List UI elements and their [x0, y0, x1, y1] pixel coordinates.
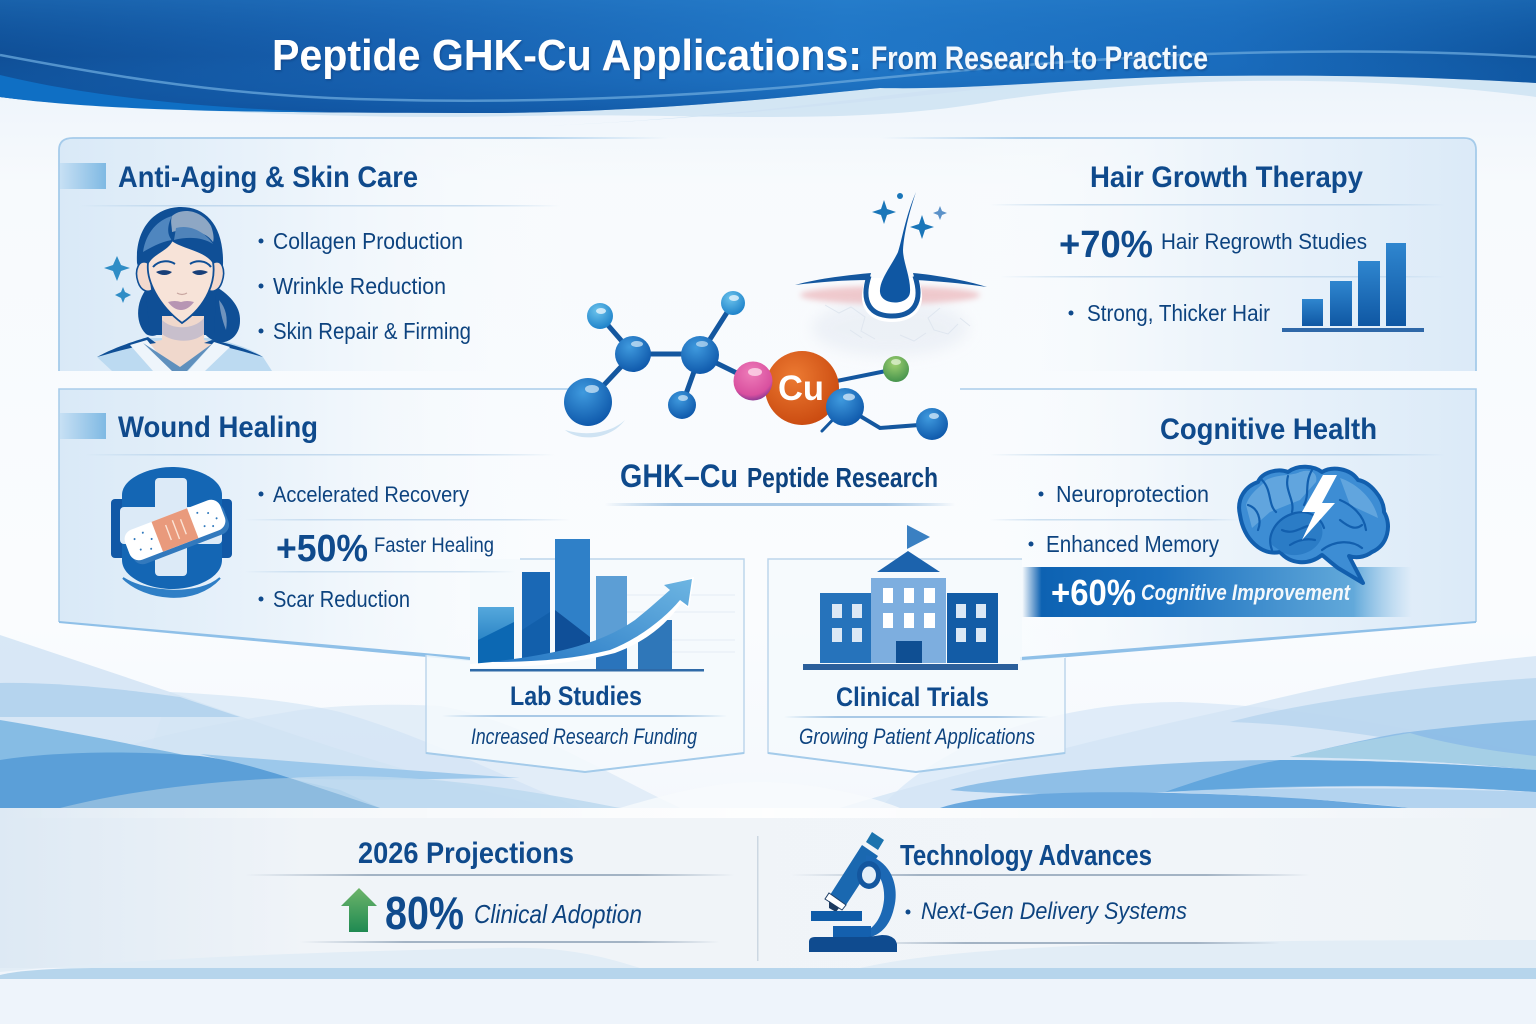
panel frame: middle row — [59, 389, 1476, 661]
stat: faster healing — [276, 528, 494, 570]
heading: 2026 projections: 2026 Projections — [358, 837, 574, 870]
icon: hospital building — [803, 525, 1018, 670]
icon: green up arrow — [341, 888, 377, 932]
heading: wound healing: Wound Healing — [118, 411, 318, 444]
callout: cognitive improvement: Cognitive Improvement — [1141, 580, 1351, 605]
panel: wound healing — [60, 411, 570, 612]
stat: clinical adoption — [385, 887, 642, 939]
heading: lab studies: Lab Studies — [510, 681, 642, 711]
icon: brain — [1239, 467, 1388, 583]
title: Peptide GHK-Cu Applications: — [272, 31, 862, 80]
caption: GHK-Cu peptide research: Peptide Research — [747, 462, 938, 493]
lower background waves — [0, 635, 1536, 808]
stat: hair regrowth: Hair Regrowth Studies — [1161, 229, 1367, 254]
stat: hair regrowth — [1059, 224, 1367, 266]
icon: microscope — [809, 832, 897, 952]
panel: clinical trials — [768, 525, 1065, 772]
panel: lab studies — [426, 539, 744, 772]
icon: woman's face — [97, 207, 272, 371]
caption: GHK-Cu peptide research: GHK–Cu — [620, 458, 738, 494]
chart: rising bars with arrow — [470, 539, 704, 672]
heading: anti-aging: Anti-Aging & Skin Care — [118, 161, 418, 194]
bullet: enhanced memory: Enhanced Memory — [1046, 531, 1219, 557]
icon: hair follicle — [795, 192, 987, 356]
stat: clinical adoption: Clinical Adoption — [474, 899, 642, 929]
stat: faster healing: +50% — [276, 528, 368, 570]
stat: faster healing: Faster Healing — [374, 534, 494, 557]
header banner — [0, 0, 1536, 126]
panel: hair growth therapy — [990, 161, 1445, 332]
stat: hair regrowth: +70% — [1059, 224, 1153, 266]
bullet: scar reduction: Scar Reduction — [273, 586, 410, 612]
panel: technology advances — [790, 832, 1310, 952]
subtitle: From Research to Practice — [871, 40, 1208, 76]
callout: cognitive improvement: +60% — [1051, 572, 1136, 613]
icon: GHK-Cu molecule — [564, 291, 948, 440]
icon: bandage — [111, 467, 232, 597]
stat: clinical adoption: 80% — [385, 887, 464, 939]
chart: hair bars — [1282, 243, 1424, 332]
list: anti-aging benefits: Wrinkle Reduction — [273, 273, 446, 299]
panel frame: top row — [59, 138, 1476, 371]
list: anti-aging benefits: Collagen Production — [273, 228, 463, 254]
panel: anti-aging — [60, 161, 560, 371]
list: anti-aging benefits: Skin Repair & Firming — [273, 318, 471, 344]
callout: cognitive improvement — [1022, 567, 1412, 617]
panel: cognitive health — [990, 413, 1445, 617]
bullet: neuroprotection: Neuroprotection — [1056, 481, 1209, 507]
bottom band — [0, 808, 1536, 1024]
panel: 2026 projections — [245, 837, 735, 943]
bullet: delivery systems: Next-Gen Delivery Systems — [921, 898, 1187, 925]
caption: patient applications: Growing Patient Applications — [799, 724, 1035, 749]
bullet: accelerated recovery: Accelerated Recovery — [273, 482, 469, 507]
bullet: thicker hair: Strong, Thicker Hair — [1087, 300, 1270, 326]
list: anti-aging benefits — [258, 228, 471, 344]
heading: cognitive health: Cognitive Health — [1160, 413, 1377, 446]
label: copper atom: Cu — [778, 369, 824, 408]
caption: research funding: Increased Research Funding — [471, 724, 698, 749]
heading: clinical trials: Clinical Trials — [836, 682, 989, 712]
heading: hair growth: Hair Growth Therapy — [1090, 161, 1363, 194]
heading: technology advances: Technology Advances — [900, 840, 1152, 872]
caption: GHK-Cu peptide research — [605, 458, 955, 506]
